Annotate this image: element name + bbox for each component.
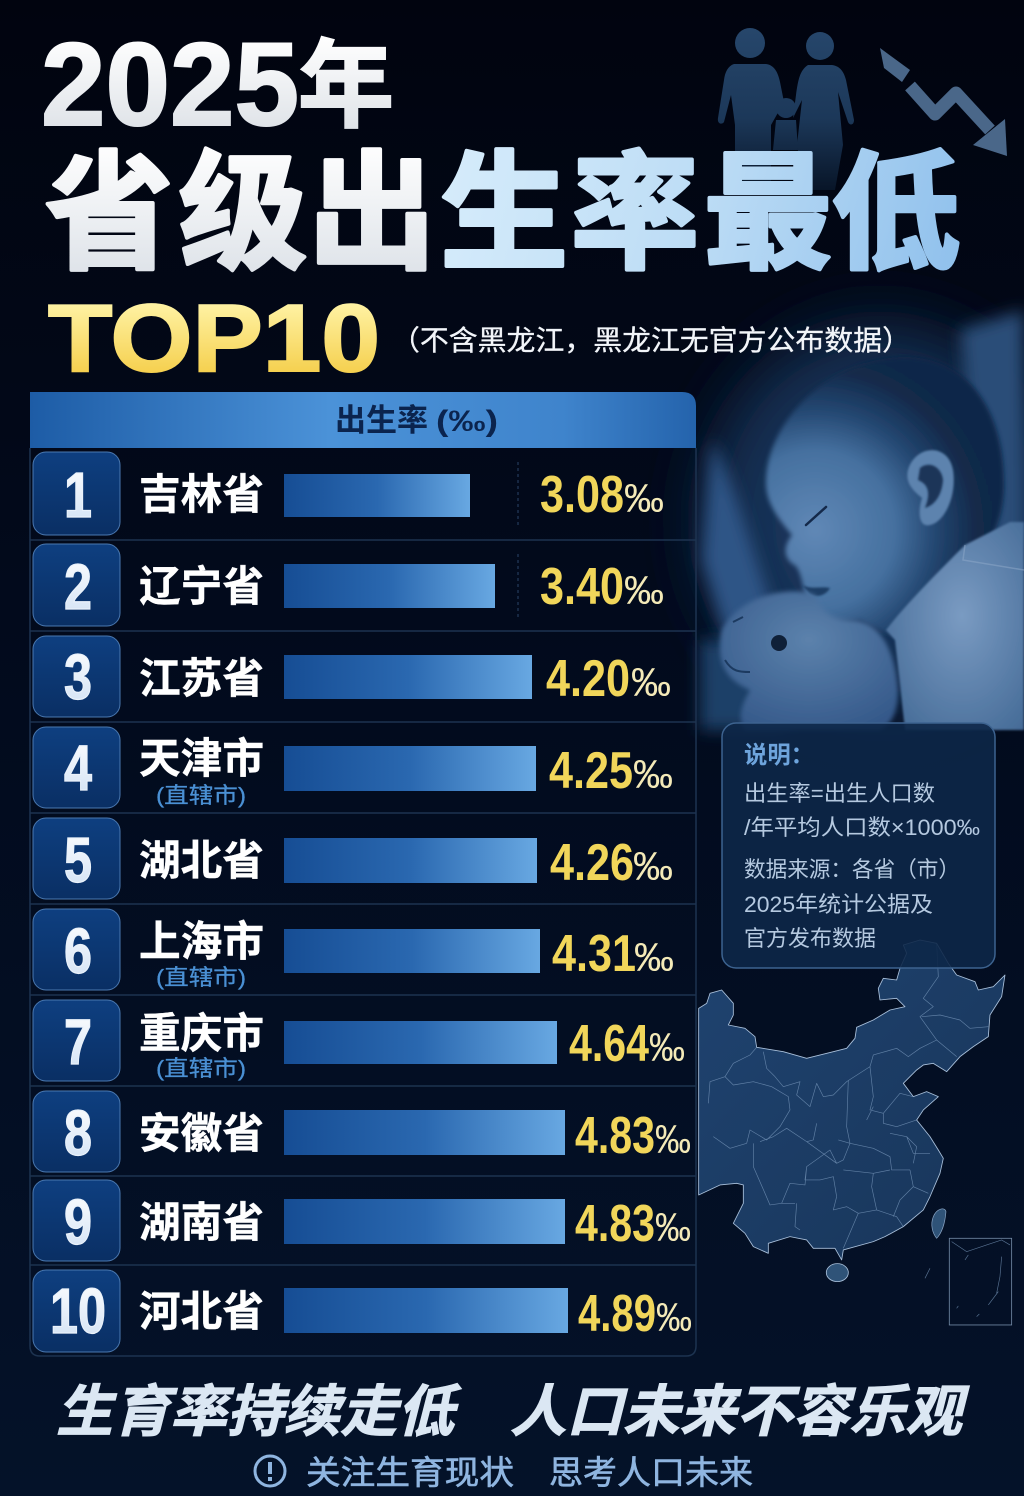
baby head (766, 357, 1004, 640)
row 2: ‰ (624, 569, 664, 613)
bottom slogan (56, 1380, 970, 1443)
table header (30, 392, 696, 448)
row 6: 4.31 (552, 925, 636, 983)
row 10: 4.89 (578, 1285, 656, 1343)
row 3: 江苏省 (139, 655, 264, 702)
note panel: 出生率=出生人口数 (744, 781, 935, 806)
baby ear (907, 450, 954, 525)
row 1: 1 (64, 459, 92, 531)
row 5: 4.26 (550, 834, 634, 892)
icon: info circle (255, 1456, 285, 1486)
subtitle note: （不含黑龙江，黑龙江无官方公布数据） (391, 325, 911, 356)
row 3: 4.20 (546, 650, 630, 708)
title TOP10: TOP10 (48, 285, 380, 392)
row 3 (33, 636, 671, 717)
row 7: 7 (64, 1006, 92, 1078)
photo: sleeping baby with plush toy (660, 280, 1024, 760)
row 8: 安徽省 (139, 1110, 264, 1157)
bottom call to action: 思考人口未来 (549, 1454, 753, 1491)
row 4: 4 (64, 732, 92, 804)
row 7: (直辖市) (156, 1056, 246, 1081)
row 8: 4.83 (575, 1107, 655, 1165)
bottom call to action: 关注生育现状 (306, 1454, 514, 1491)
row 9: 湖南省 (139, 1199, 264, 1246)
row 2: 辽宁省 (139, 563, 264, 610)
row 9: ‰ (655, 1206, 691, 1250)
row 4: 4.25 (549, 742, 633, 800)
table header: 出生率 (335, 403, 428, 438)
bottom slogan: 生育率持续走低 (56, 1380, 462, 1443)
row 5 (33, 818, 673, 899)
row 9: 9 (64, 1186, 92, 1258)
row 9 (33, 1180, 691, 1261)
row 6: 上海市 (139, 918, 264, 965)
title line 2 (45, 143, 960, 286)
row 4: (直辖市) (156, 783, 246, 808)
row 9: 4.83 (575, 1195, 655, 1253)
plush toy (720, 591, 898, 730)
row 3: 3 (64, 641, 92, 713)
row 6: (直辖市) (156, 965, 246, 990)
row 5: 5 (64, 824, 92, 896)
row 2: 2 (64, 551, 92, 623)
row 8: ‰ (655, 1118, 691, 1162)
row 6: ‰ (634, 936, 674, 980)
title line 2: 省级出 (45, 143, 436, 286)
row 4: 天津市 (139, 735, 264, 782)
note panel: 说明： (744, 742, 814, 769)
note panel: 数据来源：各省（市） (744, 857, 960, 882)
row 10: 河北省 (139, 1288, 264, 1335)
row 7: 重庆市 (139, 1010, 264, 1057)
bottom slogan: 人口未来不容乐观 (510, 1380, 970, 1443)
row 5: 湖北省 (139, 837, 264, 884)
row 2: 3.40 (540, 558, 624, 616)
row 1 (33, 452, 664, 535)
note panel: 2025年统计公据及 (744, 892, 933, 917)
table header: (‰) (436, 405, 498, 438)
row 8: 8 (64, 1097, 92, 1169)
map of China (699, 940, 1012, 1325)
row 3: ‰ (631, 661, 671, 705)
note panel (722, 723, 995, 968)
icon: falling trend arrow (880, 48, 1007, 156)
row 10: ‰ (656, 1296, 692, 1340)
note panel: /年平均人口数×1000‰ (744, 815, 980, 840)
row 4: ‰ (633, 753, 673, 797)
note panel: 官方发布数据 (744, 926, 876, 951)
row 6 (33, 909, 674, 990)
baby eye and mouth (806, 507, 826, 525)
row 7: ‰ (649, 1026, 685, 1070)
table frame (30, 448, 696, 1356)
row 2 (33, 544, 664, 626)
title line 1: 2025 (41, 19, 299, 151)
row 1: ‰ (624, 477, 664, 521)
title line 1: 年 (298, 33, 394, 140)
row 7: 4.64 (569, 1015, 649, 1073)
row 7 (33, 1000, 685, 1081)
ranking table panel (30, 392, 696, 1356)
row 1: 吉林省 (139, 471, 264, 518)
row 10 (33, 1270, 692, 1352)
title line 2: 生率最低 (440, 143, 960, 286)
bottom call to action (306, 1454, 753, 1491)
row 1: 3.08 (540, 466, 624, 524)
row 10: 10 (50, 1275, 106, 1347)
row 8 (33, 1091, 691, 1172)
icon: family silhouette (718, 28, 854, 190)
row 6: 6 (64, 915, 92, 987)
baby clothes (886, 522, 1024, 730)
row 5: ‰ (633, 845, 673, 889)
row 4 (33, 727, 673, 808)
